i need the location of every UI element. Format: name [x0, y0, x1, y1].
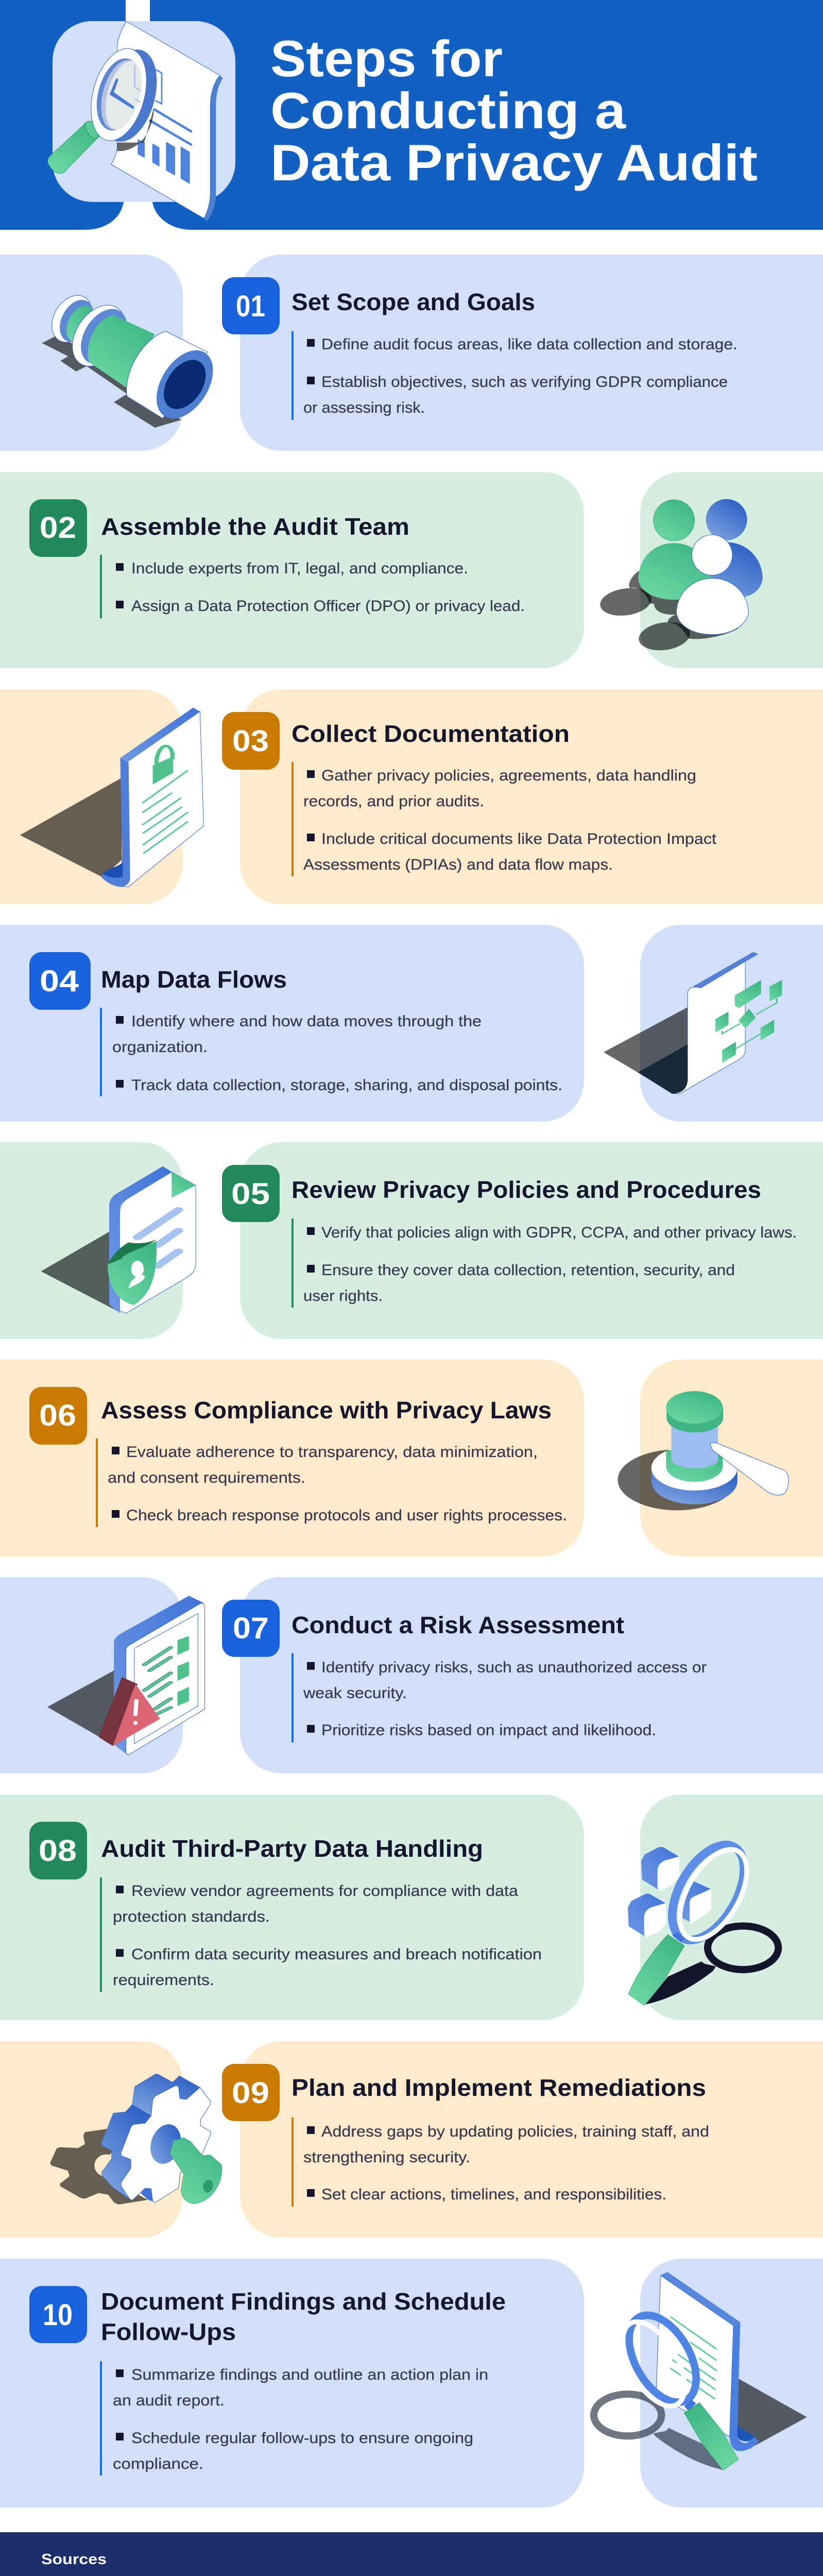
- bullets 07: weak security.: [303, 1685, 407, 1702]
- badge 05: [222, 1165, 280, 1222]
- bullets 08: requirements.: [113, 1972, 214, 1989]
- icon: risk checklist: [47, 1596, 204, 1755]
- badge 05: 05: [231, 1177, 270, 1211]
- heading 02: Assemble the Audit Team: [101, 513, 409, 540]
- bullets 09: [292, 2117, 709, 2207]
- bullets 06: Check breach response protocols and user rights processes.: [126, 1507, 567, 1524]
- sources heading: Sources: [41, 2551, 107, 2568]
- heading 10: Follow-Ups: [101, 2318, 236, 2345]
- bullets 03: Assessments (DPIAs) and data flow maps.: [303, 856, 613, 873]
- panel: step 09 text: [240, 2041, 823, 2238]
- bullets 10: [100, 2361, 488, 2476]
- heading 08: Audit Third-Party Data Handling: [101, 1835, 483, 1862]
- panel: step 07 image: [0, 1577, 183, 1773]
- step 04: [0, 925, 823, 1122]
- panel: step 10 image: [640, 2259, 823, 2507]
- footer: [0, 2532, 823, 2576]
- title: Conducting a: [270, 82, 626, 139]
- badge 04: 04: [40, 964, 79, 998]
- panel: step 03 image: [0, 689, 183, 904]
- icon: report with magnifier: [594, 2272, 807, 2470]
- title: [270, 30, 758, 191]
- icon: telescope: [42, 294, 223, 428]
- panel: step 06 image: [640, 1360, 823, 1556]
- panel: step 10 text: [0, 2259, 584, 2507]
- badge 03: [222, 712, 280, 770]
- step 09: [0, 2041, 823, 2238]
- bullets 08: [100, 1877, 542, 1992]
- bullets 09: Address gaps by updating policies, training staff, and: [321, 2123, 709, 2140]
- icon: locked document: [20, 708, 203, 887]
- badge 07: [222, 1600, 280, 1657]
- icon: magnifier over data blocks: [628, 1833, 778, 2005]
- heading 04: Map Data Flows: [101, 966, 287, 993]
- badge 10: [29, 2286, 87, 2343]
- title: Data Privacy Audit: [270, 134, 758, 191]
- panel: step 04 image: [640, 925, 823, 1122]
- panel: step 01 text: [240, 255, 823, 451]
- step 02: [0, 472, 823, 668]
- bullets 02: Assign a Data Protection Officer (DPO) or privacy lead.: [131, 598, 525, 615]
- bullets 04: organization.: [112, 1039, 208, 1056]
- bullets 01: Establish objectives, such as verifying GDPR compliance: [321, 374, 728, 391]
- bullets 08: Confirm data security measures and breach notification: [131, 1946, 542, 1963]
- bullets 07: Identify privacy risks, such as unauthorized access or: [321, 1659, 707, 1676]
- bullets 03: records, and prior audits.: [303, 793, 484, 810]
- bullets 10: compliance.: [113, 2455, 203, 2472]
- panel: step 07 text: [240, 1577, 823, 1773]
- badge 03: 03: [232, 724, 269, 758]
- bullets 01: or assessing risk.: [303, 399, 425, 416]
- bullets 05: Verify that policies align with GDPR, CCPA, and other privacy laws.: [321, 1224, 797, 1241]
- panel: step 02 text: [0, 472, 584, 668]
- panel: step 01 image: [0, 255, 183, 451]
- badge 06: [29, 1387, 87, 1445]
- bullets 01: [292, 331, 738, 420]
- bullets 04: Identify where and how data moves through the: [131, 1013, 482, 1030]
- badge 01: 01: [236, 290, 265, 323]
- panel: step 05 text: [240, 1142, 823, 1339]
- badge 09: 09: [232, 2076, 269, 2110]
- badge 08: 08: [39, 1834, 77, 1868]
- bullets 08: protection standards.: [113, 1908, 270, 1925]
- bullets 06: and consent requirements.: [108, 1469, 305, 1486]
- header icon panel: [53, 21, 235, 202]
- step 08: [0, 1794, 823, 2020]
- step 05: [0, 1142, 823, 1339]
- heading 07: Conduct a Risk Assessment: [292, 1612, 624, 1638]
- icon: policy document with shield: [41, 1166, 196, 1313]
- header banner: [0, 0, 823, 230]
- bullets 06: Evaluate adherence to transparency, data minimization,: [126, 1444, 538, 1461]
- heading 10: Document Findings and Schedule: [101, 2288, 506, 2315]
- panel: step 04 text: [0, 925, 584, 1122]
- badge 08: [29, 1822, 87, 1879]
- badge 02: 02: [40, 511, 76, 545]
- icon: team: [598, 499, 763, 653]
- icon: gear and key: [50, 2074, 222, 2205]
- badge 02: [29, 499, 87, 557]
- badge 07: 07: [233, 1612, 269, 1645]
- bullets 03: Include critical documents like Data Protection Impact: [321, 831, 717, 848]
- bullets 05: [292, 1218, 797, 1308]
- panel: step 05 image: [0, 1142, 183, 1339]
- bullets 04: [100, 1008, 562, 1096]
- bullets 07: Prioritize risks based on impact and likelihood.: [321, 1722, 656, 1739]
- title: Steps for: [270, 30, 503, 87]
- icon: data flow document: [604, 952, 782, 1094]
- step 03: [0, 689, 823, 904]
- panel: step 06 text: [0, 1360, 584, 1556]
- step 07: [0, 1577, 823, 1773]
- heading 01: Set Scope and Goals: [292, 289, 535, 315]
- heading 05: Review Privacy Policies and Procedures: [292, 1176, 761, 1203]
- badge 09: [222, 2064, 280, 2121]
- step 10: [0, 2259, 823, 2507]
- heading 03: Collect Documentation: [292, 720, 570, 747]
- bullets 04: Track data collection, storage, sharing, and disposal points.: [131, 1077, 562, 1094]
- bullets 10: an audit report.: [113, 2392, 225, 2409]
- panel: step 02 image: [640, 472, 823, 668]
- icon: gavel: [618, 1391, 788, 1511]
- bullets 09: strengthening security.: [303, 2149, 470, 2166]
- bullets 05: user rights.: [303, 1287, 383, 1304]
- bullets 02: [100, 555, 525, 618]
- panel: step 08 text: [0, 1794, 584, 2020]
- heading 10: [101, 2288, 506, 2345]
- bullets 03: Gather privacy policies, agreements, data handling: [321, 767, 696, 784]
- bullets 01: Define audit focus areas, like data collection and storage.: [321, 336, 738, 353]
- heading 06: Assess Compliance with Privacy Laws: [101, 1397, 552, 1423]
- panel: step 03 text: [240, 689, 823, 904]
- panel: step 09 image: [0, 2041, 183, 2238]
- bullets 07: [292, 1653, 707, 1742]
- bullets 03: [292, 762, 717, 876]
- step 06: [0, 1360, 823, 1556]
- heading 09: Plan and Implement Remediations: [292, 2074, 706, 2101]
- icon: audit document with magnifier: [48, 22, 223, 221]
- bullets 02: Include experts from IT, legal, and compliance.: [131, 560, 468, 577]
- bullets 08: Review vendor agreements for compliance with data: [131, 1883, 518, 1900]
- badge 04: [29, 952, 91, 1010]
- bullets 09: Set clear actions, timelines, and responsibilities.: [321, 2186, 666, 2203]
- panel: step 08 image: [640, 1794, 823, 2020]
- bullets 10: Schedule regular follow-ups to ensure ongoing: [131, 2430, 473, 2447]
- badge 06: 06: [39, 1399, 76, 1432]
- step 01: [0, 255, 823, 451]
- bullets 10: Summarize findings and outline an action plan in: [131, 2366, 488, 2383]
- badge 10: 10: [43, 2298, 73, 2332]
- badge 01: [222, 277, 280, 334]
- bullets 05: Ensure they cover data collection, retention, security, and: [321, 1262, 735, 1279]
- bullets 06: [96, 1438, 567, 1527]
